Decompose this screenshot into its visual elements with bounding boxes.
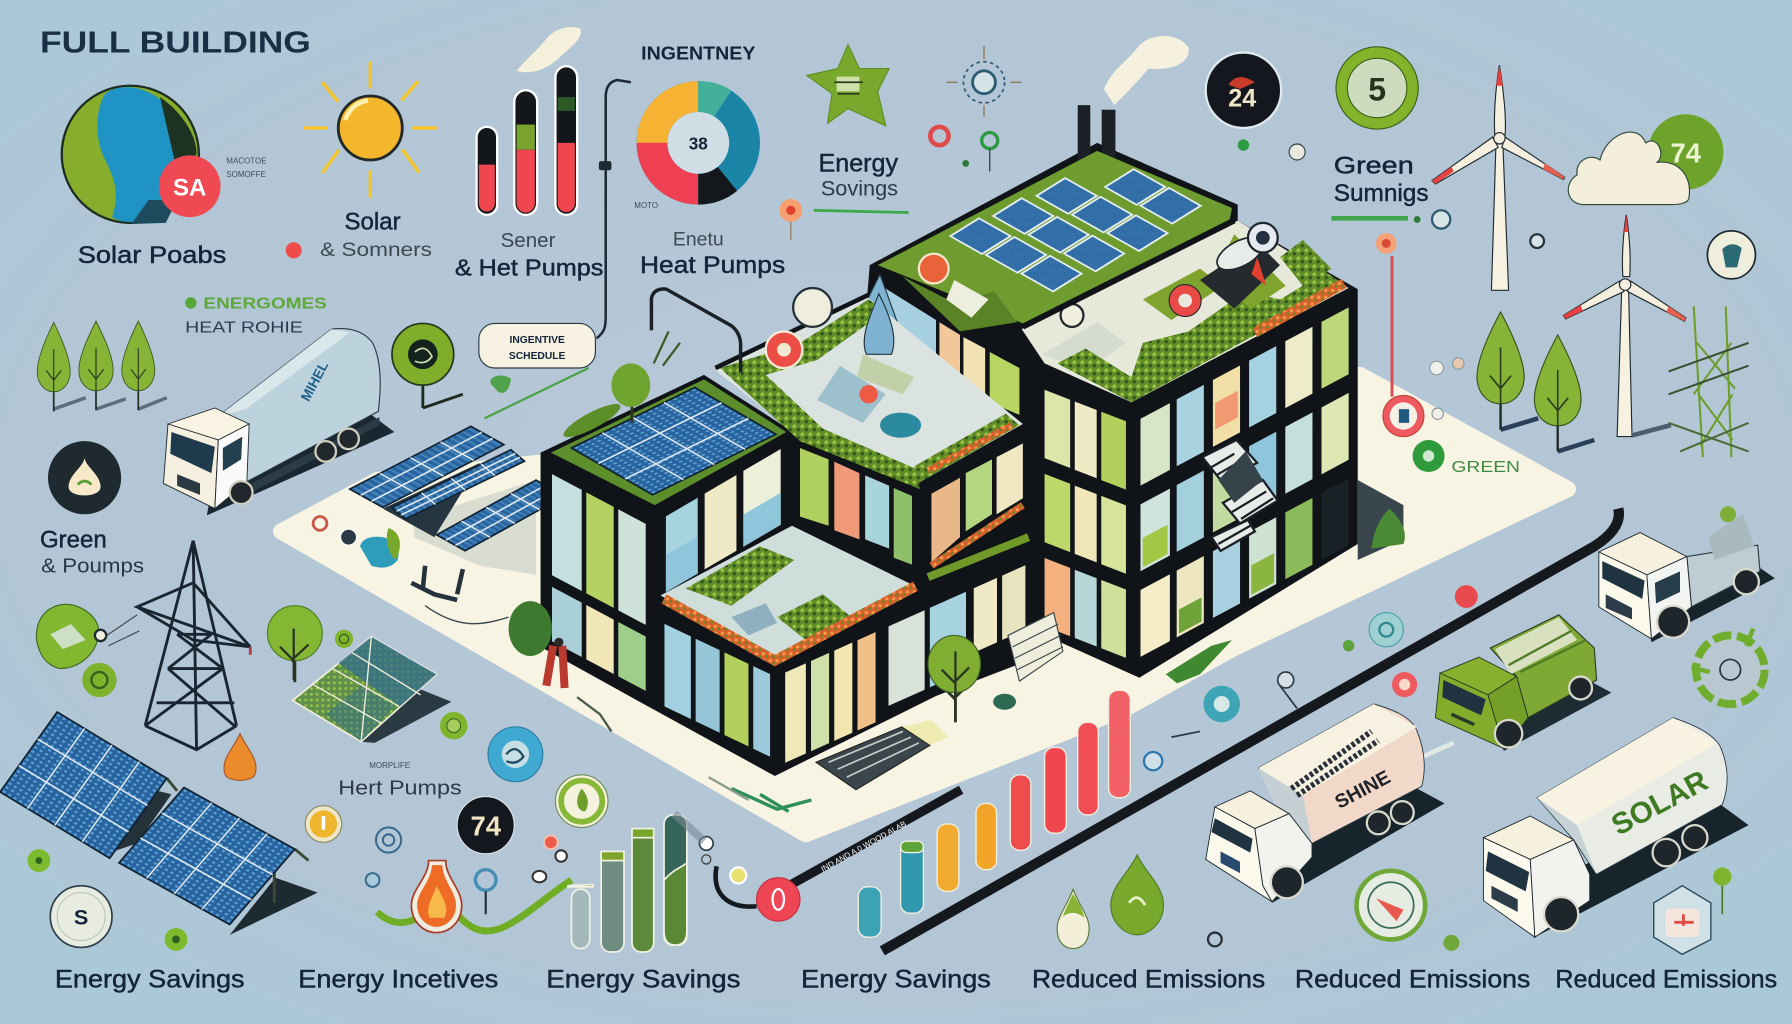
ground plants near corner <box>1166 640 1232 683</box>
truck: green <box>1435 615 1611 751</box>
icon: dark badge: 24 <box>1228 84 1256 112</box>
connector: black curve and red node: IND AND A 0 WOOD ALAB <box>819 819 908 874</box>
truck: top-left tanker <box>163 329 394 515</box>
label: solar: Solar <box>345 209 401 236</box>
icon: target circle <box>946 46 1022 117</box>
label: green sumnigs: Sumnigs <box>1334 180 1429 207</box>
label: energy green: ENERGOMES <box>203 296 327 313</box>
green wire <box>377 880 571 931</box>
label: energy heat pumps <box>640 229 785 279</box>
connector wire <box>597 80 631 338</box>
label: green pumps <box>40 526 144 578</box>
wire loop <box>651 289 741 373</box>
wind turbine 1 <box>1432 65 1565 290</box>
label: ingentney: INGENTNEY <box>641 42 755 63</box>
label: energy green <box>185 296 327 337</box>
icon: small green dots <box>27 849 187 951</box>
icon: yellow circle <box>305 806 342 842</box>
solar panel: mid green <box>293 637 451 743</box>
small ring <box>1530 234 1544 248</box>
chart: thermometer bars <box>477 66 577 215</box>
small items on platform <box>313 517 509 624</box>
callout pill: SCHEDULE <box>509 351 566 362</box>
green connector <box>485 368 589 418</box>
truck: solar tanker: SOLAR <box>1606 764 1714 842</box>
icon: flame bulb <box>411 861 462 933</box>
label: hert pumps: Hert Pumps <box>338 776 462 799</box>
icon: globe with badge: MACOTOE <box>226 156 267 165</box>
callout pill: INGENTIVE <box>509 335 565 346</box>
label: energy incentives: Energy Incetives <box>298 965 498 993</box>
truck: top-left tanker: MIHEL <box>298 359 331 404</box>
road band <box>882 509 1619 951</box>
callout pill <box>479 323 595 368</box>
icon: bulb circle <box>48 441 121 514</box>
upper left facade <box>1045 390 1126 658</box>
label: reduced emissions 3: Reduced Emissions <box>1555 965 1777 993</box>
lower roof solar <box>551 379 786 505</box>
chimneys <box>1078 36 1189 184</box>
road pins <box>1144 585 1478 770</box>
connector: black curve and red node <box>674 790 961 921</box>
label: solar poabs: Solar Poabs <box>78 242 226 269</box>
chart: test tubes <box>568 815 687 952</box>
icon: green ring badge: 5 <box>1368 72 1386 108</box>
icon: blue circle <box>488 727 543 782</box>
building silhouette <box>541 143 1358 776</box>
trees right <box>1477 312 1594 451</box>
truck: shine tanker: SHINE <box>1331 766 1394 814</box>
icon: green drop <box>1111 855 1163 935</box>
icon: green gear <box>1691 629 1765 704</box>
icon: green ring badge <box>1336 47 1418 129</box>
label: green sumnigs <box>1334 153 1429 207</box>
trees left <box>37 321 167 411</box>
icon: globe with badge: SA <box>173 174 206 201</box>
tree: front <box>928 635 981 722</box>
middle terrace <box>715 288 1023 489</box>
small shrub <box>993 694 1016 710</box>
icon: lattice tower green <box>1669 306 1749 457</box>
label: sener: Sener <box>501 229 556 252</box>
label: energy savings center: Energy <box>818 149 899 177</box>
front plants and people <box>509 601 811 811</box>
label: energy heat pumps: Enetu <box>673 229 724 251</box>
label: somners <box>286 239 432 261</box>
icon: globe with badge: SOMOFFE <box>226 170 266 179</box>
upper rear facade <box>863 274 1019 415</box>
label: green sumnigs: Green <box>1334 153 1414 180</box>
solar panels: bottom-left <box>0 712 318 935</box>
truck: top-right <box>1599 506 1775 642</box>
label: energy savings 1: Energy Savings <box>55 965 245 993</box>
icon: green ring circle <box>555 775 608 827</box>
green marker and label: GREEN <box>1451 459 1520 476</box>
icon: coin S <box>50 886 112 947</box>
icon: orange drop <box>224 734 256 781</box>
icon: swirl and pins <box>366 827 567 914</box>
smoke plume <box>517 27 581 72</box>
chart: rising bars <box>858 690 1130 937</box>
low terrace <box>661 526 915 664</box>
icon: globe with badge <box>62 86 267 224</box>
icon: cloud with green badge: 74 <box>1670 137 1702 168</box>
icon: circle right <box>1707 231 1755 279</box>
label: energy savings center <box>818 149 899 200</box>
label: hert pumps <box>338 761 462 799</box>
icon: sun <box>305 63 435 197</box>
icon: 74 badge <box>457 797 514 854</box>
link between trucks <box>1423 743 1454 757</box>
label: het pumps: & Het Pumps <box>455 254 603 280</box>
label: energy heat pumps: Heat Pumps <box>640 252 785 279</box>
label: reduced emissions 1: Reduced Emissions <box>1032 965 1265 993</box>
icon: ring target <box>1357 871 1425 939</box>
upper terrace <box>1022 221 1349 402</box>
ground platform <box>281 375 1568 834</box>
label: somners: & Somners <box>320 239 432 261</box>
label: energy savings 2: Energy Savings <box>546 965 741 993</box>
chart: donut <box>634 81 760 210</box>
label: energy savings 3: Energy Savings <box>801 965 991 993</box>
truck: solar tanker <box>1483 718 1749 937</box>
upper right facade <box>1140 307 1349 657</box>
lower front left facade <box>664 624 770 757</box>
building <box>509 36 1405 811</box>
icon: red pin line <box>1376 233 1424 437</box>
label: energy green: HEAT ROHIE <box>185 320 303 337</box>
icon: green star <box>807 45 889 126</box>
icon: 74 badge: 74 <box>470 810 502 841</box>
label: reduced emissions 2: Reduced Emissions <box>1295 965 1530 993</box>
middle facades <box>800 443 1029 577</box>
rooftop tree and shrubs <box>560 331 680 443</box>
small green rings <box>335 630 467 739</box>
small pins <box>779 127 1305 240</box>
chart: donut: 38 <box>689 134 708 154</box>
label: green pumps: Green <box>40 526 107 553</box>
green bar marker <box>1331 210 1450 229</box>
label: hert pumps: MORPLIFE <box>369 761 410 770</box>
small white markers <box>1430 358 1464 419</box>
roof equipment <box>1061 223 1280 327</box>
entrance stairs <box>816 720 949 790</box>
solar panels near building <box>350 426 565 575</box>
recess with plant <box>1358 480 1405 560</box>
bottom labels <box>55 965 1777 993</box>
left block front facade <box>552 474 646 691</box>
staircase <box>1202 440 1278 551</box>
label: energy savings center: Sovings <box>821 175 898 200</box>
icon: transmission tower <box>137 541 250 750</box>
icon: dark badge <box>1206 53 1281 128</box>
chart: donut: MOTO <box>634 201 658 210</box>
icon: hex gauge <box>1654 867 1731 954</box>
truck: shine tanker <box>1206 704 1445 903</box>
lower right facade <box>785 565 1025 763</box>
left block right facade <box>666 449 781 592</box>
icon: small drop <box>1057 889 1089 949</box>
entrance steps upper <box>1008 613 1063 681</box>
green marker and label <box>1413 440 1520 476</box>
icon: coin S: S <box>74 905 88 930</box>
upper roof <box>878 151 1234 331</box>
label: green pumps: & Poumps <box>41 555 144 578</box>
wind turbine 2 <box>1563 215 1686 437</box>
tree: round <box>267 606 322 682</box>
title: FULL BUILDING <box>40 25 311 60</box>
small bottom marks <box>1208 933 1459 951</box>
icon: cloud with green badge <box>1568 114 1723 205</box>
icon: green network circles <box>36 604 139 697</box>
icon: green circle pin <box>392 323 463 408</box>
